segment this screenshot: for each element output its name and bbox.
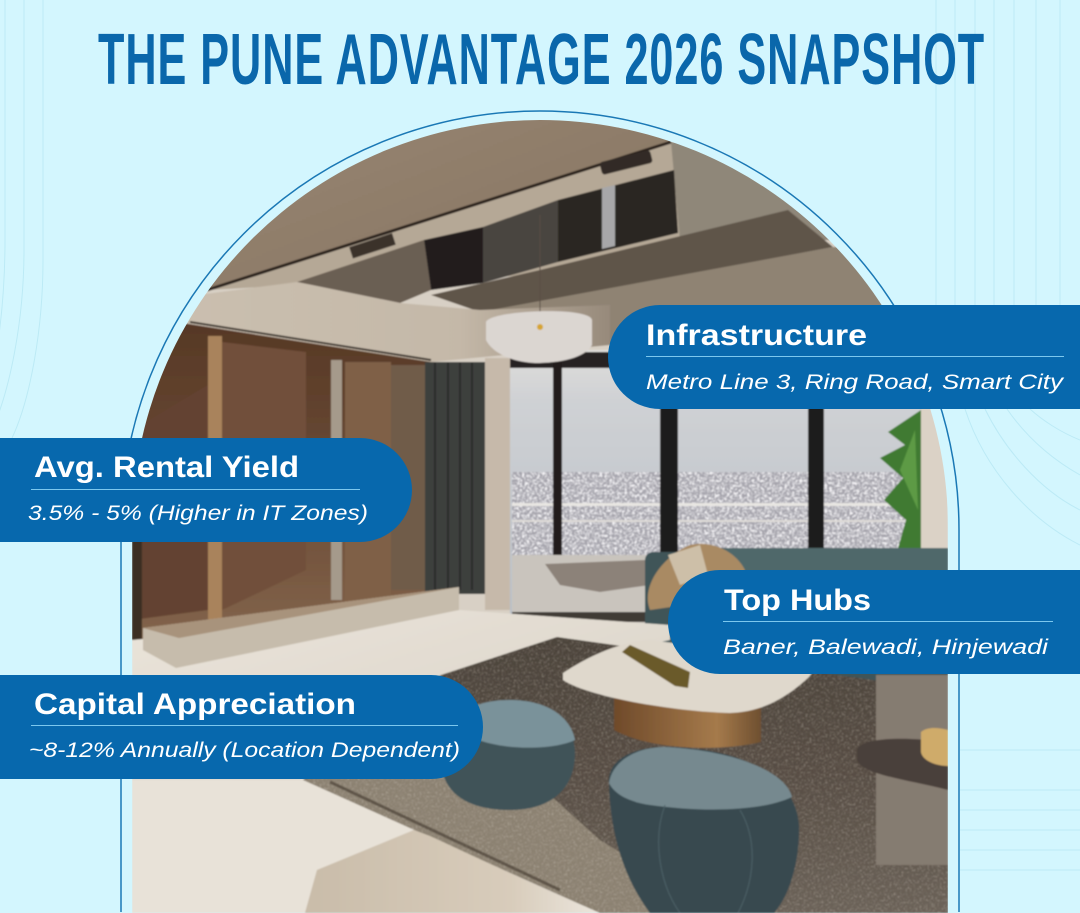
plant [880,410,921,560]
brown band [431,210,833,312]
side chair [876,675,948,865]
panel: infrastructure [608,305,1080,409]
arch outline [121,111,959,912]
sofa [645,552,948,692]
marble platform [132,780,414,913]
beam [207,142,690,290]
right pillar [920,412,923,548]
title: THE PUNE ADVANTAGE 2026 SNAPSHOT [98,19,984,100]
gold cup [921,728,948,766]
rug [303,637,948,913]
panel: rental yield [0,438,412,542]
heading: rental yield: Avg. Rental Yield [34,451,299,484]
heading: capital appreciation: Capital Appreciation [34,688,356,721]
scroll [622,645,690,688]
text: rental yield detail: 3.5% - 5% (Higher in IT Zones) [28,502,368,525]
left ottoman [444,740,576,811]
wood wall [140,322,430,640]
marble floor [132,610,670,780]
heading: top hubs: Top Hubs [724,584,871,617]
outdoor chair and terrace [512,555,652,625]
upper ceiling [210,120,670,289]
window [510,350,922,625]
text: top hubs detail: Baner, Balewadi, Hinjewadi [723,636,1050,659]
lower ceiling [180,282,610,362]
interior photo illustration [130,100,950,913]
coffee table base [614,695,761,748]
marble ledge [143,587,459,668]
coffee table top [563,640,820,713]
side table [857,739,948,790]
sheer curtain [485,358,513,610]
right ottoman [609,747,799,913]
text: infrastructure detail: Metro Line 3, Ring Road, Smart City [646,371,1065,394]
ceiling lines [207,142,671,290]
panel: capital appreciation [0,675,483,779]
grey ceiling right [670,142,830,241]
chandelier [485,266,593,364]
heading: infrastructure: Infrastructure [646,319,867,352]
dark curtain [425,362,485,594]
text: capital appreciation detail: ~8-12% Annually (Location Dependent) [29,739,460,762]
mirror ceiling [297,240,431,303]
panel: top hubs [668,570,1080,674]
